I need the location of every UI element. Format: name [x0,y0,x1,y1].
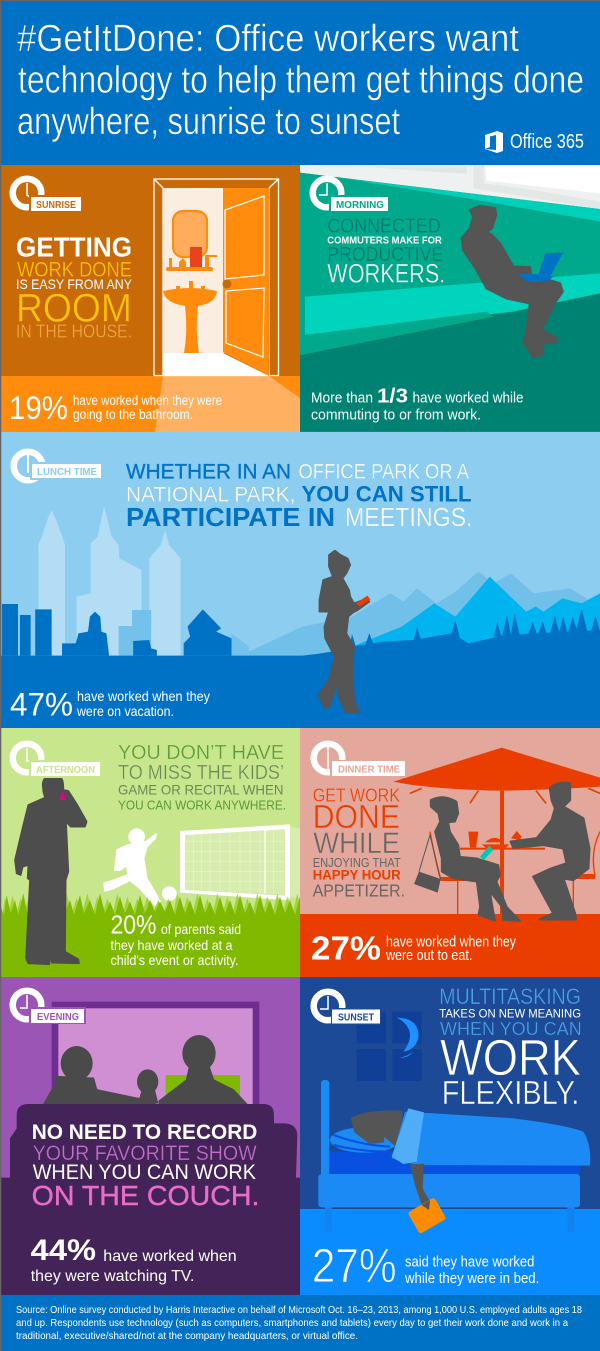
headline: kids game: TO MISS THE KIDS’ [118,762,284,784]
stat: 27% out to eat: were out to eat. [385,948,472,964]
panel: evening [0,977,300,1295]
headline: connected commuters: COMMUTERS MAKE FOR [327,234,442,246]
headline: kids game [118,742,286,812]
stat: 19%: 19% [9,390,68,426]
light beam [155,376,300,432]
stat: 1/3 [311,385,524,423]
stat: 27% in bed: while they were in bed. [404,1270,539,1287]
headline: get work done: HAPPY HOUR [313,868,401,883]
train interior [300,165,600,432]
headline: no need to record [32,1121,259,1211]
man on phone [15,774,87,964]
panel: dinner time [300,728,600,977]
headline: multitasking: FLEXIBLY. [442,1075,579,1112]
stat: 20% [110,909,241,968]
headline: getting work done: IS EASY FROM ANY [16,276,133,292]
city and mountain landscape [0,506,600,728]
headline: kids game: GAME OR RECITAL WHEN [118,781,284,797]
headline: getting work done: GETTING [16,232,132,263]
clock badge: lunch time: LUNCH TIME [37,466,97,478]
headline: getting work done [16,232,133,342]
man with laptop [462,206,563,357]
soccer scene [0,824,300,978]
panel: afternoon [0,728,300,978]
clock badge: afternoon [13,744,102,778]
stat: 20%: of parents said [161,921,241,937]
stat: 19% [9,390,222,426]
clock badge: dinner time [314,744,407,778]
headline: whether in an office park: WHETHER IN AN [126,460,291,483]
panel: lunch time [0,432,600,728]
stat: 20%: child's event or activity. [110,952,238,968]
footer source note [0,1295,600,1351]
stat: 27% in bed: 27% [312,1240,397,1293]
headline: no need to record: NO NEED TO RECORD [32,1121,257,1144]
clock badge: morning: MORNING [336,199,384,211]
panel: sunrise [0,165,300,432]
stat: 47%: 47% [10,687,73,723]
bed with sleeper [318,1080,590,1234]
headline: connected commuters: WORKERS. [327,259,445,289]
headline: whether in an office park [126,460,472,532]
umbrella and table [393,748,600,915]
headline: kids game: YOU CAN WORK ANYWHERE. [118,798,286,812]
headline: get work done: DONE [313,798,400,835]
title: #GetItDone: Office workers want [17,18,519,60]
headline: whether in an office park: YOU CAN STILL [302,482,472,507]
headline: no need to record: YOUR FAVORITE SHOW [33,1142,257,1165]
title: anywhere, sunrise to sunset [17,101,400,143]
stat: 47%: were on vacation. [76,703,174,719]
stat: 19%: going to the bathroom. [73,407,193,422]
clock badge: sunset [314,992,381,1025]
clock badge: evening [13,991,86,1024]
headline: get work done: APPETIZER. [313,881,405,901]
headline: get work done: WHILE [313,827,400,860]
headline: whether in an office park: OFFICE PARK OR A [298,460,469,483]
couch [0,1104,300,1295]
stat: 19%: have worked when they were [73,393,222,408]
night window with moon [357,1012,422,1081]
headline: multitasking: WORK [440,1029,581,1086]
headline: get work done: GET WORK [313,786,400,806]
stat: 47%: have worked when they [77,688,210,704]
stat: 27% in bed [312,1240,539,1293]
headline: kids game: YOU DON’T HAVE [118,742,284,764]
clock badge: evening: EVENING [37,1011,79,1023]
couple at table [414,783,589,921]
headline: multitasking: WHEN YOU CAN [440,1018,582,1039]
stat: 44%: 44% [31,1234,96,1267]
clock badge: sunrise: SUNRISE [36,199,76,211]
panel: sunset [300,977,600,1295]
stat: 1/3: More than [311,389,373,406]
clock badge: sunrise [13,179,83,213]
stat: 44% [31,1234,237,1285]
stat: 44%: have worked when [103,1248,237,1265]
woman with phone [318,551,370,713]
headline: whether in an office park: PARTICIPATE IN [126,502,335,532]
headline: connected commuters: PRODUCTIVE [327,243,443,266]
stat: 1/3: 1/3 [377,385,408,407]
headline: getting work done: ROOM [16,287,132,331]
stat: 1/3: commuting to or from work. [311,406,481,423]
stat: 27% out to eat: have worked when they [386,935,517,951]
headline: no need to record: ON THE COUCH. [32,1180,259,1211]
headline: multitasking: MULTITASKING [439,984,581,1009]
headline: getting work done: IN THE HOUSE. [16,321,132,342]
door illustration [154,179,278,376]
stat: 27% in bed: said they have worked [405,1254,534,1271]
panel: morning [300,165,600,432]
stat: 27% out to eat [311,929,517,966]
clock badge: sunset: SUNSET [338,1012,374,1024]
headline: no need to record: WHEN YOU CAN WORK [33,1161,256,1184]
title [17,18,584,143]
headline: connected commuters [327,214,445,289]
grass [0,893,300,978]
stat: 47% [10,687,210,723]
stat: 20%: they have worked at a [110,937,233,953]
clock badge: afternoon: AFTERNOON [36,764,95,776]
headline: get work done: ENJOYING THAT [313,855,401,870]
headline: multitasking: TAKES ON NEW MEANING [439,1007,581,1021]
icon: Office 365 logo [485,130,584,153]
clock badge: dinner time: DINNER TIME [338,764,400,776]
floor [300,1209,600,1295]
stat: 27% out to eat: 27% [311,929,381,966]
headline: get work done [313,786,405,901]
clock badge: lunch time [14,452,103,480]
stat: 20%: 20% [110,909,156,939]
headline: connected commuters: CONNECTED [327,214,441,237]
stat: 44%: they were watching TV. [31,1268,194,1285]
stat: 1/3: have worked while [412,389,524,406]
headline: getting work done: WORK DONE [17,258,132,282]
header panel [0,0,600,165]
clock badge: morning [313,179,390,213]
headline: whether in an office park: MEETINGS. [345,502,472,532]
headline: whether in an office park: NATIONAL PARK, [126,484,296,507]
headline: multitasking [439,984,582,1112]
tv room scene [43,1002,259,1108]
footer source note: traditional, executive/shared/not at the company headquarters, or virtual office. [16,1330,358,1342]
